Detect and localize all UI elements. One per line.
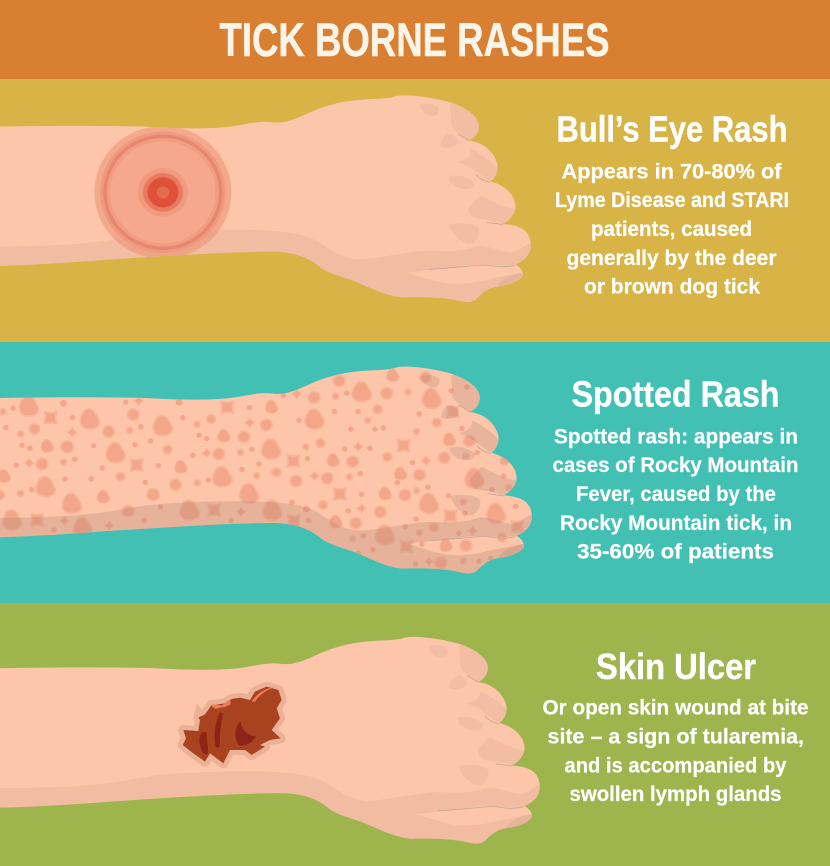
text block: Lyme Disease and STARI — [555, 189, 789, 212]
illustration: arm with ulcer — [0, 637, 546, 855]
text block: site – a sign of tularemia, — [548, 726, 804, 748]
text block: Rocky Mountain tick, in — [560, 512, 792, 535]
text block — [552, 426, 798, 564]
text block: Fever, caused by the — [576, 483, 776, 506]
text block: 35-60% of patients — [577, 540, 774, 564]
heading: Spotted Rash — [572, 374, 780, 414]
heading: Bull’s Eye Rash — [556, 108, 788, 150]
panel: spotted rash — [0, 342, 830, 603]
text block: or brown dog tick — [584, 276, 760, 298]
text block: Appears in 70-80% of — [562, 160, 783, 184]
text block: and is accompanied by — [564, 754, 787, 778]
illustration: arm with bull's eye rash — [0, 95, 537, 313]
text block: Spotted rash: appears in — [554, 426, 798, 448]
panel: skin ulcer — [0, 603, 830, 866]
header band — [0, 0, 830, 79]
spots — [0, 368, 524, 568]
text block: swollen lymph glands — [570, 783, 782, 806]
icon: concentric rash rings — [94, 126, 231, 259]
text block — [542, 696, 808, 806]
text block — [555, 160, 789, 298]
icon: skin ulcer wound — [183, 687, 282, 763]
title: TICK BORNE RASHES — [220, 13, 610, 66]
text block: generally by the deer — [566, 247, 776, 270]
panel: bull's eye rash — [0, 79, 830, 342]
text block: patients, caused — [591, 218, 752, 241]
text block: Or open skin wound at bite — [542, 696, 808, 720]
text block: cases of Rocky Mountain — [552, 454, 798, 477]
heading: Skin Ulcer — [596, 646, 756, 687]
illustration: arm with spotted rash — [0, 367, 538, 585]
